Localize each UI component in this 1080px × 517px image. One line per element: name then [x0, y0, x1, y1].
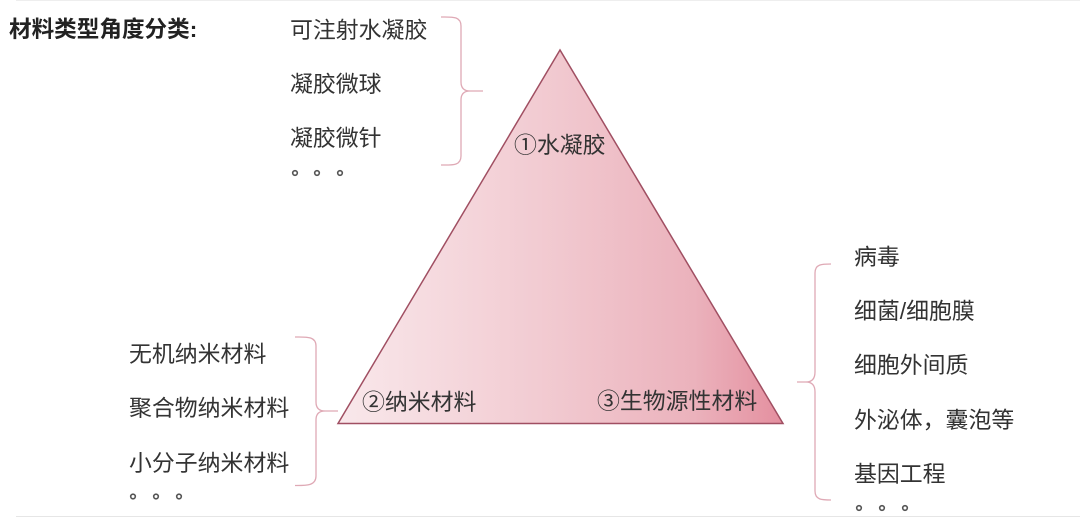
list: biogenic types: 细胞外间质: [854, 352, 968, 378]
label: hydrogel: ①水凝胶: [514, 132, 606, 158]
label: biogenic materials: ③生物源性材料: [597, 388, 757, 414]
brace: nanomaterials: [295, 337, 338, 486]
list: nanomaterial types: [129, 341, 289, 499]
list: biogenic types: 病毒: [854, 244, 900, 270]
list: hydrogel types: 可注射水凝胶: [290, 17, 427, 43]
list: hydrogel types: 凝胶微针: [290, 125, 382, 151]
title: 材料类型角度分类:: [9, 17, 197, 42]
list: nanomaterial types: 聚合物纳米材料: [129, 395, 289, 421]
brace: hydrogel: [441, 17, 483, 165]
list: nanomaterial types: 小分子纳米材料: [129, 450, 289, 476]
triangle: [338, 50, 783, 424]
brace: biogenic materials: [797, 264, 831, 500]
list: hydrogel types: [290, 17, 427, 175]
list: nanomaterial types: 无机纳米材料: [129, 341, 266, 367]
list: hydrogel types: 凝胶微球: [290, 71, 382, 97]
list: biogenic types: 细菌/细胞膜: [854, 298, 975, 324]
label: nanomaterials: ②纳米材料: [362, 389, 477, 415]
list: biogenic types: [854, 244, 1014, 510]
list: biogenic types: 基因工程: [854, 461, 946, 487]
list: biogenic types: 外泌体，囊泡等: [854, 407, 1014, 433]
